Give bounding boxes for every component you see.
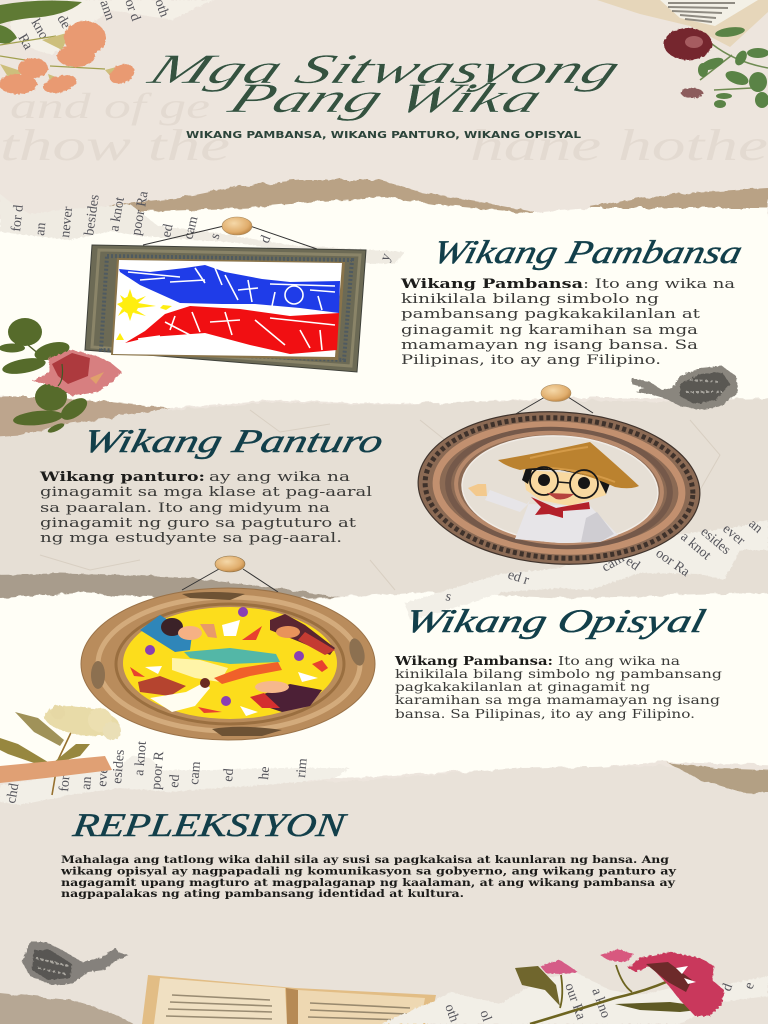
torn paper strip behind flag frame: poor Ra <box>129 189 152 237</box>
torn paper strip right of middle: ever <box>719 522 748 549</box>
torn paper strip lower left: ever <box>95 762 112 787</box>
torn paper strip behind flag frame: a knot <box>107 196 128 233</box>
torn paper strip right of middle <box>405 517 768 620</box>
torn paper strip lower left: an <box>79 776 95 790</box>
title: Pang Wika <box>220 75 551 122</box>
faint handwriting texture: hande so <box>110 917 410 959</box>
nail and wires <box>143 217 317 249</box>
text block: Wikang Opisyal: kinikilala bilang simbolo ng pambansang <box>395 667 722 681</box>
torn paper strip behind flag frame: for d <box>9 204 27 232</box>
torn paper strip right of middle: ed <box>623 554 642 574</box>
torn paper strip lower left: ed <box>221 768 237 782</box>
faint handwriting texture: Ohne dass <box>440 844 760 895</box>
text block: Wikang Opisyal: bansa. Sa Pilipinas, ito ay ang Filipino. <box>395 707 695 721</box>
cracks in band two <box>40 410 720 590</box>
torn brown edge: top left <box>35 180 535 230</box>
faint handwriting texture: hane hothe <box>470 121 768 170</box>
round bronze frame <box>414 405 704 571</box>
top left paper strip: kno <box>28 16 51 42</box>
text block: Wikang Panturo: ginagamit sa mga klase at pag-aaral <box>40 485 372 500</box>
flag frame panel <box>85 217 366 372</box>
torn paper strip right of middle: cam <box>600 551 627 575</box>
heading: Wikang Opisyal: Wikang Opisyal <box>401 603 709 640</box>
torn paper strip bottom right <box>380 972 768 1024</box>
text block: Repleksiyon: Mahalaga ang tatlong wika dahil sila ay susi sa pagkakaisa at kaunlaran ng bansa. Ang <box>61 854 670 866</box>
torn paper strip behind flag frame: d <box>258 233 274 245</box>
subtitle: WIKANG PAMBANSA, WIKANG PANTURO, WIKANG OPISYAL <box>186 130 581 141</box>
faint handwriting texture: thow the <box>0 121 230 170</box>
icon: grey butterfly right <box>632 366 738 410</box>
torn paper strip lower left <box>0 740 350 805</box>
character frame panel <box>414 384 704 571</box>
icon: open book bottom <box>142 975 436 1024</box>
torn paper strip right of middle: oor Ra <box>653 546 693 580</box>
colourful folk painting <box>123 607 337 719</box>
torn paper strip bottom right: e <box>742 980 758 991</box>
top left paper strip: de <box>54 12 73 31</box>
text block: Wikang Opisyal: pagkakakilanlan at ginagamit ng <box>395 680 650 694</box>
torn brown edge: middle left <box>0 573 340 603</box>
text block: Wikang Pambansa: ginagamit ng karamihan sa mga <box>401 323 698 338</box>
text block: Wikang Opisyal: karamihan sa mga mamamayan ng isang <box>395 693 720 707</box>
flag artwork <box>113 260 342 357</box>
title: Mga Sitwasyong <box>140 46 629 93</box>
nail and wires <box>182 556 278 592</box>
torn paper strip behind flag frame: ed <box>159 223 177 239</box>
torn paper strip lower left: cam <box>187 761 204 785</box>
text block: Wikang Pambansa: mamamayan ng isang bansa. Sa <box>401 338 698 353</box>
text block: Wikang Pambansa <box>400 277 735 368</box>
torn brown edge: right of band four <box>668 763 768 794</box>
icon: orange flowers and leaf <box>0 1 138 96</box>
icon: grey butterfly bottom left <box>22 942 128 985</box>
icon: dark rose with leaves <box>664 25 768 108</box>
heading: Wikang Panturo: Wikang Panturo <box>79 423 387 460</box>
faint handwriting texture: and of ge <box>10 86 210 126</box>
text block: Wikang Panturo <box>39 470 372 546</box>
character illustration <box>468 442 639 543</box>
torn paper strip right of middle: ed r <box>506 568 531 589</box>
torn paper strip lower left: rim <box>294 758 311 778</box>
torn paper strip right of middle: s <box>444 589 453 605</box>
torn paper strip lower left: esides <box>110 749 128 784</box>
icon: pink rose with leaves <box>0 318 122 435</box>
heading: Wikang Pambansa: Wikang Pambansa <box>429 234 746 271</box>
torn paper strip behind flag frame: y <box>378 251 394 263</box>
beige band two <box>0 398 768 600</box>
picture frame <box>85 245 366 372</box>
torn paper strip lower left: he <box>257 766 273 780</box>
text block: Wikang Pambansa: Wikang Pambansa <box>400 277 584 292</box>
gold oval frame <box>81 588 375 740</box>
torn paper strip behind flag frame: never <box>58 206 76 238</box>
cream band three <box>0 592 768 778</box>
text block: Wikang Panturo: Wikang panturo: <box>39 470 205 485</box>
torn paper strip behind flag frame: s <box>208 231 224 241</box>
icon: open book top right <box>597 0 768 47</box>
text block: Wikang Panturo: ginagamit ng guro sa pagtuturo at <box>40 516 357 531</box>
torn paper strip right of middle: an <box>745 517 765 537</box>
text block: Wikang Opisyal: Ito ang wika na <box>558 654 680 668</box>
icon: dried flower with orange tape <box>0 702 122 795</box>
torn paper strip behind flag frame: cam <box>181 215 202 241</box>
text block: Repleksiyon: nagagamit upang magturo at magpalaganap ng kaalaman, at ang wikang pambansa ay <box>61 877 676 889</box>
text block: Wikang Pambansa: Pilipinas, ito ay ang Filipino. <box>401 353 661 368</box>
torn paper strip behind flag frame: besides <box>82 194 103 237</box>
text block: Repleksiyon <box>60 854 677 900</box>
torn brown edge: bottom left <box>0 992 155 1024</box>
torn paper strip bottom right: a kno <box>588 986 613 1020</box>
torn paper strip bottom right: oth <box>441 1002 461 1024</box>
beige band four <box>0 766 768 1024</box>
text block: Wikang Panturo: sa paaralan. Ito ang midyum na <box>40 501 330 516</box>
faint handwriting texture: ane <box>10 834 68 879</box>
cream band one <box>0 197 768 408</box>
torn paper strip right of middle: a knot <box>677 530 714 563</box>
text block: Repleksiyon: nagpapalakas ng ating pambansang identidad at kultura. <box>61 888 464 900</box>
torn brown edge: top right <box>590 188 768 214</box>
torn paper strip lower left: poor R <box>149 750 167 790</box>
faint handwriting texture: Velene m <box>400 783 768 836</box>
top left paper strip <box>10 0 215 55</box>
torn brown edge: left of band two <box>0 397 170 437</box>
torn paper strip behind flag frame <box>0 189 405 264</box>
torn paper strip lower left: chd <box>4 782 22 805</box>
text block: Wikang Opisyal: Wikang Pambansa: <box>394 654 553 668</box>
torn paper strip lower left: for <box>57 774 73 792</box>
text block: Wikang Panturo: ng mga estudyante sa pag-aaral. <box>40 531 342 546</box>
text block: Wikang Opisyal <box>394 654 722 721</box>
heading: Repleksiyon: REPLEKSIYON <box>70 807 349 844</box>
torn paper strip lower left: ed <box>167 774 183 788</box>
text block: Repleksiyon: wikang opisyal ay nagpapadali ng komunikasyon sa gobyerno, ang wikang panturo ay <box>60 866 677 878</box>
torn paper strip bottom right: our Ra <box>561 981 589 1023</box>
icon: pink dried flower <box>515 949 724 1024</box>
text block: Wikang Pambansa: : Ito ang wika na <box>583 277 735 292</box>
title <box>140 46 629 122</box>
nail and wires <box>514 384 593 415</box>
torn paper strip right of middle: esides <box>697 525 733 558</box>
painting frame panel <box>81 556 375 740</box>
torn paper strip lower left: a knot <box>132 740 150 776</box>
top left paper strip: Ra <box>15 32 36 53</box>
torn paper strip behind flag frame: an <box>33 222 49 236</box>
text block: Wikang Panturo: ay ang wika na <box>209 470 350 485</box>
text block: Wikang Pambansa: kinikilala bilang simbolo ng <box>401 292 659 307</box>
text block: Wikang Pambansa: pambansang pagkakakilanlan at <box>401 307 701 322</box>
torn paper strip bottom right: d <box>720 982 736 993</box>
